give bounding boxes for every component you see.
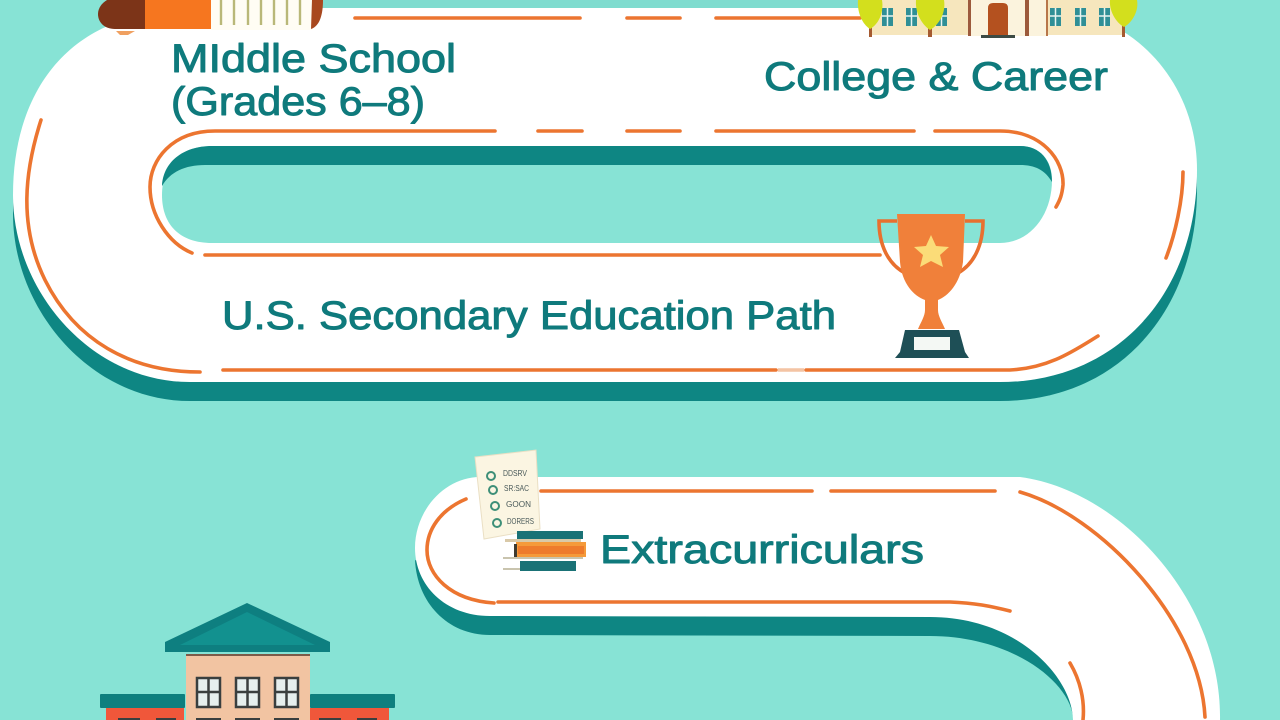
upper road dashed lane markings	[27, 18, 1183, 372]
heading: Extracurriculars: Extracurriculars	[600, 528, 924, 572]
heading: Grades 6-8: (Grades 6–8)	[171, 80, 425, 124]
icon: checklist: SR:SAC	[504, 484, 529, 493]
heading: College and Career: College & Career	[764, 55, 1108, 99]
lower road dashed lane markings	[427, 491, 1205, 720]
icon: book stack	[503, 531, 586, 571]
icon: college building	[858, 0, 1137, 38]
icon: checklist	[475, 450, 540, 539]
icon: checklist: GOON	[506, 500, 531, 509]
icon: checklist: DDSRV	[503, 469, 528, 478]
title: U.S. Secondary Education Path: U.S. Secondary Education Path	[222, 294, 836, 338]
upper road	[13, 8, 1197, 401]
lower road	[415, 477, 1220, 720]
icon: checklist: DORERS	[507, 517, 534, 526]
inner road wall	[162, 146, 1052, 186]
heading: Middle School: MIddle School	[171, 37, 456, 81]
icon: notebook	[98, 0, 323, 35]
icon: trophy	[879, 214, 983, 358]
icon: school building	[100, 603, 395, 720]
